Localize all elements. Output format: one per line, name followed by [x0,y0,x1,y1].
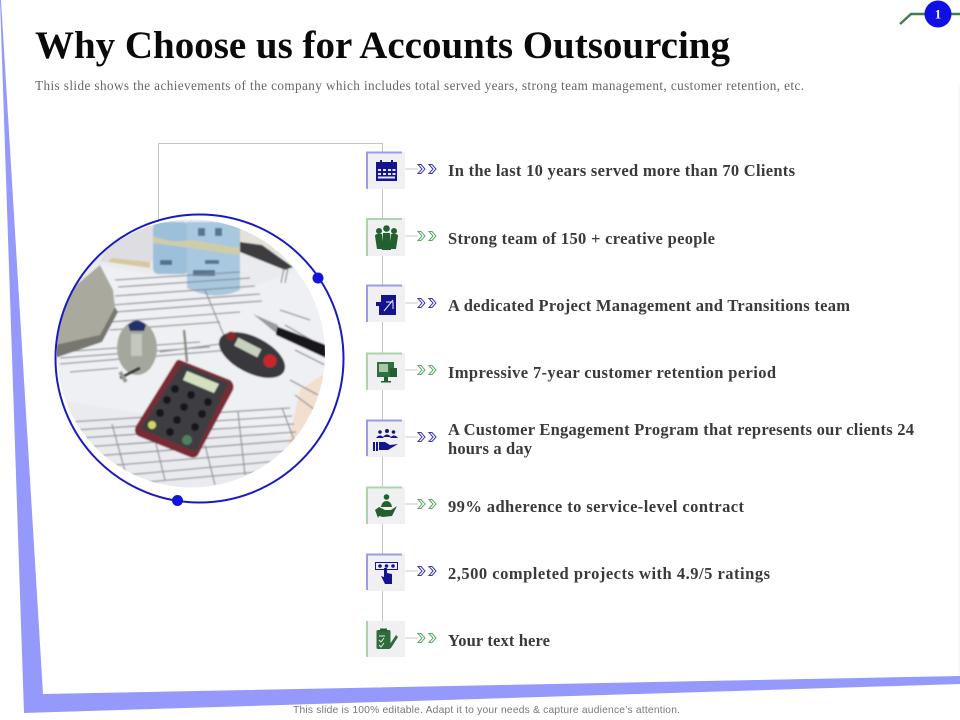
item 6: tile with care icon [366,487,405,524]
red calculator [135,360,234,458]
item 7: pointer [405,566,436,576]
item 6: text: 99% adherence to service-level contract [448,497,744,516]
document text texture [60,272,325,485]
photo: documents and security tokens [55,218,330,490]
item 4: tile with monitor icon [366,353,405,390]
item 1: text: In the last 10 years served more than 70 Clients [448,161,796,180]
page number badge [900,0,960,28]
connector lines [158,144,382,625]
item 8: tile with checklist icon [366,621,405,657]
ring around photo [56,214,344,506]
item 5: tile with engagement icon [366,420,405,457]
subtitle: This slide shows the achievements of the company which includes total served years, strong team management, customer retention, etc. [35,78,804,93]
item 4: pointer [405,366,436,374]
item 3: text: A dedicated Project Management and Transitions team [448,296,850,315]
item 2: text: Strong team of 150 + creative people [448,229,715,248]
title: Why Choose us for Accounts Outsourcing [35,24,730,67]
item 8: text: Your text here [448,631,550,650]
item 6: pointer [405,500,436,508]
item 1: pointer [405,164,436,174]
page number badge: 1 [935,8,941,22]
oval token [117,321,157,375]
item 7: tile with rating icon [366,554,405,591]
pen [276,326,326,358]
item 2: tile with team icon [366,218,405,256]
item 8: pointer [405,634,436,642]
item 5: text: A Customer Engagement Program that represents our clients 24 [448,420,914,439]
item 2: pointer [405,232,436,240]
item 3: pointer [405,298,436,308]
dark token [218,331,286,379]
item 1: tile with calendar icon [366,152,405,189]
footer note: This slide is 100% editable. Adapt it to your needs & capture audience’s attention. [293,705,680,716]
item 5: pointer [405,432,436,442]
item 5: text: hours a day [448,439,533,458]
item 3: tile with project icon [366,285,405,322]
item 4: text: Impressive 7-year customer retention period [448,363,776,382]
item 7: text: 2,500 completed projects with 4.9/5 ratings [448,564,771,583]
item 5: text [448,420,914,458]
